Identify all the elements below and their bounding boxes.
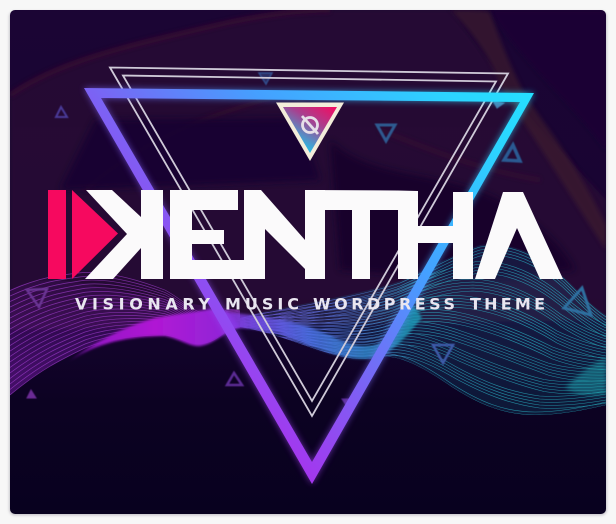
teal line wave (right) (225, 243, 606, 424)
triangle far left (27, 289, 47, 307)
triangle far right (564, 288, 591, 315)
purple line wave (left) (10, 272, 240, 396)
white outline triangles (110, 68, 508, 416)
tagline: WORDPRESS (313, 294, 455, 314)
A (475, 192, 563, 279)
K (85, 190, 163, 279)
badge triangle with logo mark (276, 102, 344, 161)
E (170, 190, 244, 279)
play icon (48, 190, 118, 279)
tagline: VISIONARY (75, 294, 210, 314)
triangle centre right (377, 125, 395, 141)
teal glow patch (565, 358, 606, 395)
background smoke swirls (10, 10, 606, 330)
inner white triangle (123, 76, 496, 401)
KENTHA logo (48, 190, 563, 279)
triangle near apex (342, 399, 350, 405)
triangle lower left (27, 390, 36, 398)
triangle right (504, 145, 520, 161)
triangle top centre (259, 73, 272, 84)
N (244, 190, 325, 279)
blue wave core (225, 303, 422, 359)
tagline: MUSIC (225, 294, 299, 314)
triangle left (56, 107, 67, 117)
badge icon (302, 116, 318, 134)
neon gradient triangle (84, 88, 534, 484)
magenta wave core (68, 309, 240, 362)
T (305, 190, 398, 279)
triangle lower centre (227, 373, 242, 385)
small floating triangles (27, 73, 591, 405)
triangle near corner (493, 101, 504, 108)
tagline (75, 294, 545, 314)
logotype letters (geometric wordmark) (85, 190, 563, 279)
triangle lower right (433, 345, 453, 363)
H (398, 190, 473, 279)
tagline: THEME (470, 294, 545, 314)
outer white triangle (110, 68, 508, 416)
